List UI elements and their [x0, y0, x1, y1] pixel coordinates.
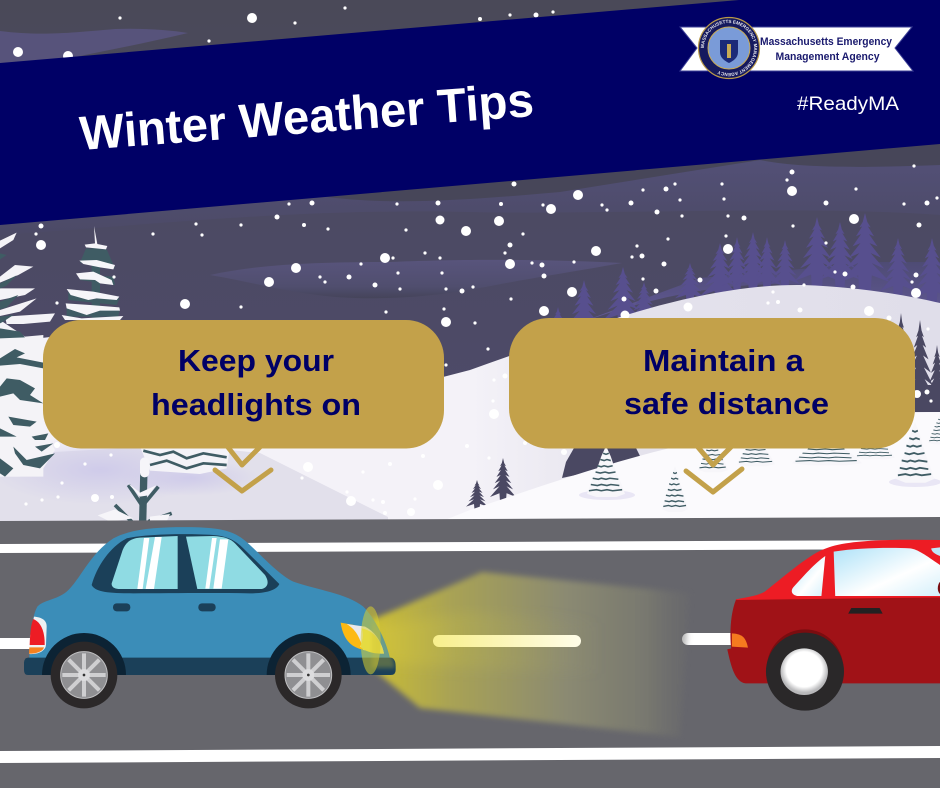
chevrons — [686, 446, 742, 492]
light glow over blue car front — [372, 620, 395, 668]
headlight beam — [372, 572, 690, 737]
callout: maintain a safe distance: Maintain a — [643, 343, 805, 378]
distant purple forest — [545, 213, 940, 347]
agency name: Massachusetts Emergency — [760, 36, 893, 48]
road — [0, 517, 940, 788]
large snowy pine left — [0, 233, 55, 477]
callout: maintain a safe distance — [509, 318, 915, 492]
chevrons — [215, 446, 271, 491]
title: Winter Weather Tips — [78, 74, 536, 161]
snow-covered small trees — [579, 415, 940, 512]
state seal: MASSACHUSETTS EMERGENCY MANAGEMENT AGENCY — [700, 20, 758, 76]
wheel arches — [42, 633, 126, 675]
callout: maintain a safe distance: safe distance — [624, 386, 829, 421]
snowy pine behind callout — [140, 447, 230, 474]
door handle — [848, 608, 883, 614]
rear wheel — [51, 642, 117, 708]
hashtag: #ReadyMA — [797, 93, 899, 115]
snowy branches — [0, 233, 55, 477]
snowy sapling foreground — [98, 457, 172, 522]
front wheel — [275, 642, 342, 708]
clouds — [0, 29, 940, 298]
upper body — [736, 540, 940, 600]
windows — [792, 556, 825, 596]
logo: Massachusetts Emergency Management Agency: Management Agency — [776, 51, 880, 63]
lower body — [727, 595, 940, 683]
trunk — [92, 247, 100, 320]
callout: keep your headlights on: Keep your — [178, 343, 334, 378]
logo: Massachusetts Emergency Management Agency — [679, 16, 914, 80]
ribbon — [680, 27, 913, 71]
callout: keep your headlights on: headlights on — [151, 387, 361, 422]
snowy branches — [62, 226, 123, 320]
blue car — [24, 527, 396, 708]
dark evergreen trees — [466, 313, 940, 510]
falling snow — [13, 6, 939, 516]
window frame — [92, 534, 279, 593]
snowy front hill right — [440, 412, 940, 522]
needle shadows — [0, 253, 55, 477]
rear light — [732, 633, 748, 648]
small snowy pine left — [62, 226, 123, 320]
door handles — [113, 603, 130, 611]
tail light — [29, 617, 47, 654]
side skirt — [24, 658, 396, 675]
windows — [112, 536, 178, 589]
snowy hill left — [0, 336, 470, 525]
callout: keep your headlights on — [43, 320, 444, 491]
header banner — [0, 0, 940, 225]
wheel — [766, 629, 844, 711]
snowy back hill right — [470, 285, 940, 520]
red car — [727, 540, 940, 711]
headlight — [341, 606, 384, 674]
background: night sky — [0, 0, 940, 525]
car body — [29, 527, 390, 670]
